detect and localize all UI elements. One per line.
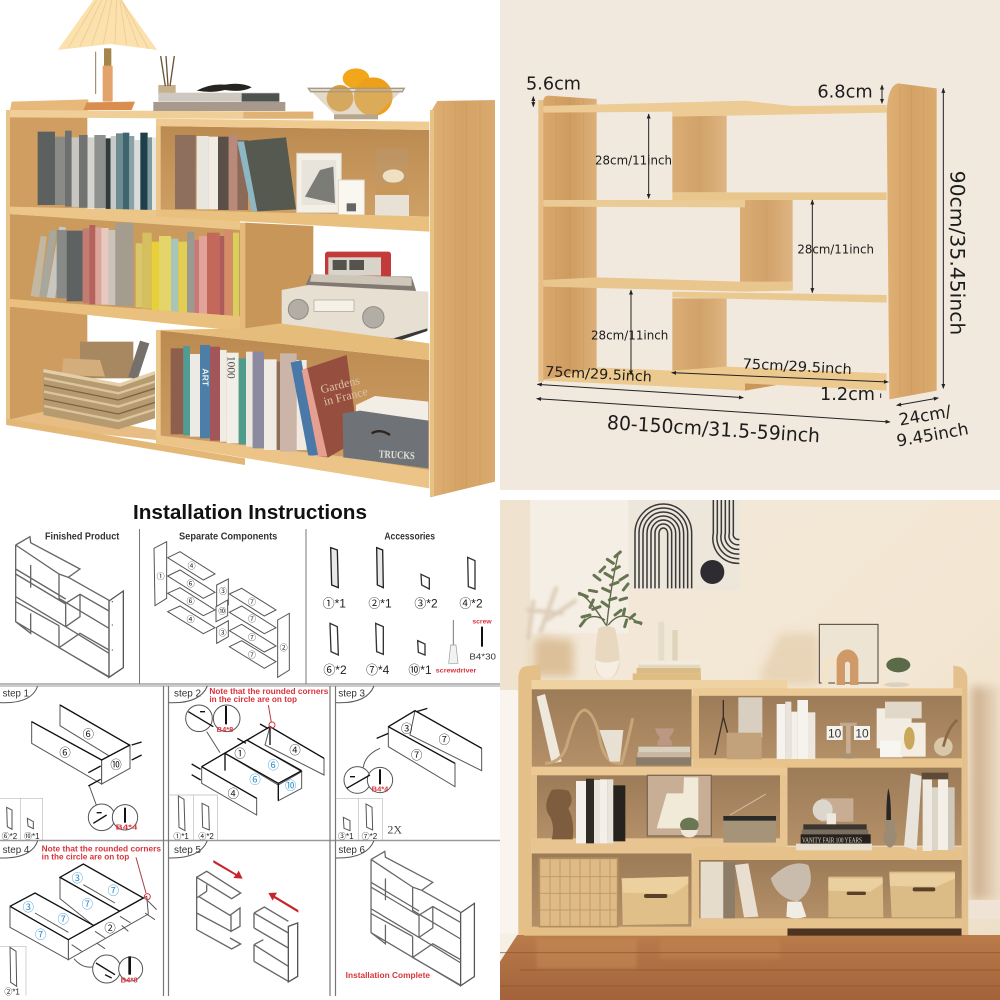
label: compartment height top: 28cm/11inch [595, 153, 672, 167]
label: right section width: 75cm/29.5inch [742, 356, 852, 378]
radio clock on books [304, 252, 417, 293]
drawing: separate components: ⑦ [248, 597, 256, 606]
flip clock: 10 [828, 727, 842, 741]
drawing: separate components: ② [280, 643, 288, 652]
step 4: B4*8 [121, 976, 138, 985]
book spine: 1000: 1000 [224, 356, 236, 379]
stereo speaker [282, 285, 428, 343]
step 4: ⑦ [108, 884, 119, 897]
heading: Accessories: Accessories [384, 531, 435, 542]
drawing: separate components: ⑦ [248, 650, 256, 659]
panel: dimensions diagram background [500, 0, 1000, 490]
shelves and frame of the bookcase [6, 99, 495, 497]
book title: Gardens in France: in France [322, 384, 369, 409]
drawing: accessories parts: ④*2 [459, 596, 483, 610]
step 4: ②*1 [4, 988, 20, 997]
step 2: ④*2 [198, 832, 214, 841]
step 1: ⑩ [110, 758, 122, 771]
label: 6.8cm: 6.8cm [817, 83, 873, 103]
drawing: accessories parts [323, 548, 483, 677]
step 2: Note that the rounded corners [209, 686, 329, 696]
icon: screw B4*30: B4*30 [469, 652, 497, 661]
book title: Gardens in France: Gardens [319, 373, 361, 396]
panel: steps 4 to 6 [0, 841, 474, 997]
grid lines of instruction panels [0, 529, 500, 996]
reed diffuser [158, 56, 176, 94]
label: total height: 90cm/35.45inch [946, 171, 969, 335]
step 2: B4*8 [217, 725, 233, 734]
drawing: separate components: ⑦ [248, 633, 256, 642]
drawing: separate components: ③ [219, 587, 227, 596]
step 2: ⑩ [285, 780, 296, 793]
step 2: ④ [228, 787, 239, 800]
table lamp [58, 0, 157, 110]
flip clock [827, 723, 870, 759]
bottom books and round ornament [701, 862, 811, 918]
step 1: ⑥ [59, 747, 71, 760]
title: Installation Instructions: Installation Instructions [133, 502, 367, 524]
step 4: ⑦ [58, 913, 69, 926]
icon: screw B4*30 [469, 618, 497, 661]
flip clock: 10 [855, 727, 869, 741]
shelf back panels [10, 117, 429, 473]
drawing: separate components: ④ [187, 615, 195, 624]
step 6: step 6 [338, 845, 365, 856]
books: top row right [175, 135, 296, 211]
books: bottom row [171, 345, 358, 457]
book spines: ART: ART [201, 368, 211, 387]
step 2: ④ [289, 744, 301, 757]
drawing: accessories parts: ②*1 [368, 596, 392, 610]
shelf drawing [538, 83, 937, 399]
step 2 [169, 686, 329, 841]
shelf 2 right: stack and books [796, 773, 955, 851]
books: middle row left [31, 223, 239, 318]
step 1: ⑩*1 [24, 832, 40, 841]
step 4: ② [104, 922, 116, 935]
step 6 [336, 841, 474, 986]
label: 1.2cm: 1.2cm [820, 385, 875, 405]
step 4: in the circle are on top [42, 852, 129, 862]
bookcase frame and back panels [518, 664, 968, 936]
small potted plant [884, 658, 910, 687]
drawing: separate components: ① [157, 572, 165, 581]
glass fruit bowl with oranges [308, 68, 404, 119]
stacked books and glasses [153, 84, 313, 118]
drawing: separate components: ③ [219, 628, 227, 637]
wall art with arches [628, 500, 740, 589]
step 3: ⑦*2 [362, 832, 378, 841]
step 4: ⑦ [82, 898, 93, 911]
step 4: ③ [23, 901, 34, 914]
drawing: separate components: ⑩ [218, 607, 226, 616]
step 3: B4*4 [372, 785, 389, 794]
drawing: separate components: ⑥ [187, 580, 195, 589]
shelf 1 right: decor and books [715, 697, 957, 759]
frame and arch ornaments [819, 624, 878, 685]
step 5: step 5 [174, 845, 201, 856]
step 4: ⑦ [35, 929, 46, 942]
picture frames and candle [297, 148, 409, 218]
step 1: ⑥*2 [2, 832, 18, 841]
woven basket [43, 341, 155, 429]
shelf 1 left: magazine rack and books [537, 694, 691, 765]
step 3: ⑦ [411, 749, 422, 762]
step 4 [0, 841, 161, 997]
drawing: separate components: ⑦ [248, 615, 256, 624]
drawing: accessories parts: ⑩*1 [408, 663, 432, 677]
step 5 [169, 841, 298, 982]
step 1 [0, 686, 142, 841]
drawing: accessories parts: ③*2 [414, 596, 438, 610]
step 3: step 3 [338, 689, 365, 700]
drawing: accessories parts: ①*1 [323, 596, 346, 610]
label: extendable width: 80-150cm/31.5-59inch [606, 411, 821, 447]
step 1: B4*4 [116, 822, 139, 831]
wall and floor [500, 500, 1000, 1000]
drawing: separate components [154, 542, 289, 677]
storage box with books [343, 396, 428, 468]
panel: bookcase in living room photo [500, 500, 1000, 1000]
label: compartment height bottom: 28cm/11inch [591, 328, 668, 342]
label: depth inch: 9.45inch [895, 419, 970, 451]
step 2: in the circle are on top [209, 694, 297, 704]
step 2: ① [234, 747, 246, 760]
step 4: ③ [72, 872, 83, 885]
panel: styled bookshelf product photo [6, 0, 495, 497]
heading: Separate Components: Separate Components [179, 531, 278, 542]
label: left section width: 75cm/29.5inch [545, 364, 652, 386]
step 3: ⑦ [439, 733, 450, 746]
panel: steps 1 to 3 [0, 686, 482, 841]
step 1: ⑥ [83, 728, 94, 741]
step 2: ⑥ [249, 773, 261, 786]
step 3: ③ [401, 722, 412, 735]
drawing: accessories parts: ⑥*2 [323, 663, 347, 677]
drawing: separate components: ⑥ [187, 597, 195, 606]
step 3: 2X [387, 822, 402, 836]
panel: installation overview [16, 531, 497, 677]
shelf 2 left: books, frame, radio [546, 775, 776, 843]
panel: dimensions diagram [526, 74, 970, 451]
step 2: ①*1 [173, 832, 189, 841]
wicker basket [539, 858, 618, 927]
label: compartment height middle: 28cm/11inch [797, 242, 874, 256]
step 4: step 4 [3, 845, 30, 856]
candles and book stack [633, 622, 701, 680]
books: top row left [38, 131, 156, 211]
step 2: ⑥ [268, 759, 279, 772]
drawing: accessories parts: ⑦*4 [366, 663, 390, 677]
step 2: step 2 [174, 689, 201, 700]
heading: Finished Product: Finished Product [45, 531, 120, 542]
step 4: Note that the rounded corners [42, 843, 161, 853]
icon: screw B4*30: screw [472, 618, 493, 625]
step 3: ③*1 [338, 832, 354, 841]
shelf 2 right: stack and books: VANITY FAIR 100 YEARS [802, 835, 862, 844]
label: TRUCKS: TRUCKS [379, 449, 415, 462]
storage boxes [622, 872, 955, 925]
icon: screwdriver [436, 620, 477, 675]
label: depth cm: 24cm/ [897, 402, 953, 430]
icon: screwdriver: screwdriver [436, 668, 477, 675]
drawing: separate components: ④ [188, 562, 196, 571]
step 1: step 1 [3, 689, 29, 700]
plant in vase [578, 552, 642, 679]
drawing: finished product [16, 537, 123, 677]
dimension arrows [533, 85, 943, 422]
step 6: Installation Complete [346, 970, 430, 980]
label: 5.6cm: 5.6cm [526, 74, 581, 94]
step 3 [336, 686, 482, 841]
